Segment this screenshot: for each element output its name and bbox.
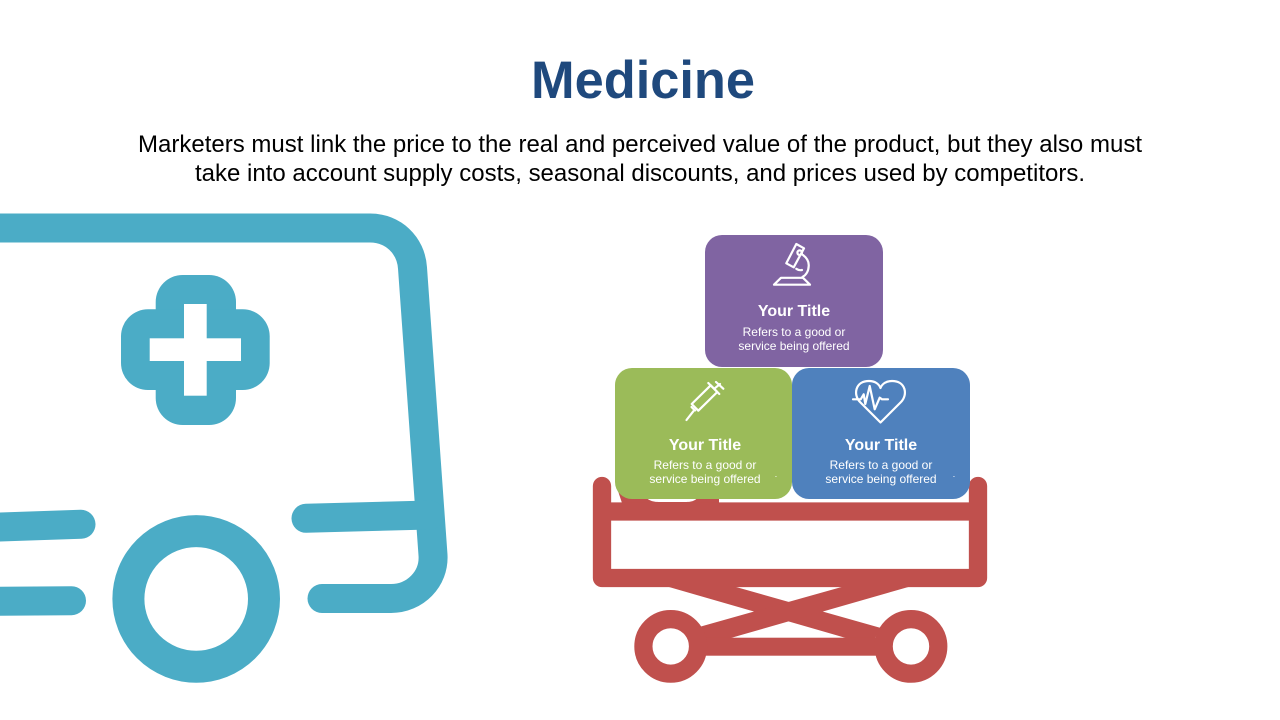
medical cross	[121, 275, 270, 425]
title: Medicine	[531, 51, 755, 110]
card description: Refers to a good or	[654, 458, 756, 472]
card title: Your Title	[845, 437, 917, 454]
card description: Refers to a good or	[830, 458, 932, 472]
scissor legs	[666, 586, 912, 650]
card description	[649, 458, 761, 486]
intro text	[138, 131, 1142, 187]
card: green	[615, 368, 792, 499]
wheel left	[643, 619, 698, 674]
card description: service being offered	[649, 472, 761, 486]
icon: syringe	[686, 382, 723, 420]
ambulance wheel	[128, 531, 264, 667]
card title: Your Title	[669, 437, 741, 454]
intro text: Marketers must link the price to the real and perceived value of the product, but they also must	[138, 131, 1142, 158]
stray dot: .	[953, 473, 955, 479]
card: purple	[705, 235, 883, 367]
card description: Refers to a good or	[743, 325, 845, 339]
stretcher frame	[602, 486, 978, 578]
card description: service being offered	[825, 472, 937, 486]
card: blue	[792, 368, 970, 499]
ambulance illustration	[0, 228, 433, 667]
stretcher	[602, 486, 978, 674]
card description	[738, 325, 850, 353]
card description	[825, 458, 937, 486]
wheel right	[884, 619, 938, 674]
speed line lower	[0, 586, 72, 616]
icon: microscope	[774, 244, 810, 285]
card description: service being offered	[738, 339, 850, 353]
intro text: take into account supply costs, seasonal discounts, and prices used by competitors.	[195, 160, 1085, 187]
ambulance body outline	[0, 228, 433, 598]
card title: Your Title	[758, 303, 830, 320]
speed line upper	[0, 524, 81, 527]
axle	[671, 638, 911, 656]
pillow	[617, 488, 719, 503]
stray dot: .	[775, 473, 777, 479]
icon: heart with pulse	[853, 381, 905, 422]
ambulance side line	[306, 515, 430, 518]
